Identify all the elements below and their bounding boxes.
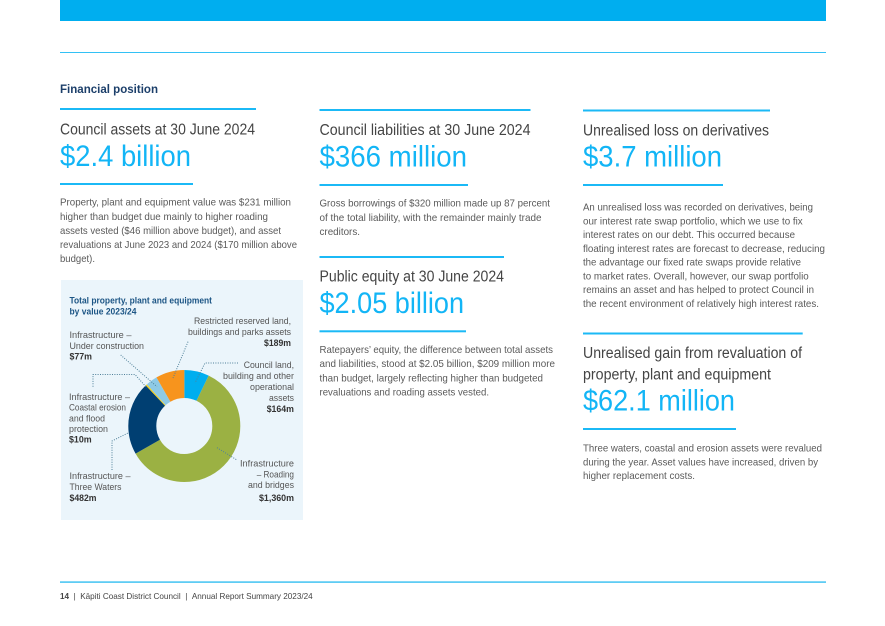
chart title: by value 2023/24 [70,306,137,316]
text block: council liabilities: of the total liability, with the remainder mainly trade [320,213,542,224]
text block: unrealised loss [583,203,825,310]
label: coastal erosion: and flood [69,413,105,423]
label: roading and bridges: and bridges [248,480,295,490]
text block: council liabilities: Gross borrowings of $320 million made up 87 percent [320,199,550,210]
section heading: Financial position [60,82,158,96]
footer rule [60,581,826,583]
label: coastal erosion: $10m [69,434,92,444]
text block: unrealised loss: the recent environment of relatively high interest rates. [583,299,819,310]
value: council liabilities: $366 million [320,140,467,174]
heading: unrealised gain [583,345,803,383]
panel: public equity [320,256,555,398]
text block: unrealised gain: during the year. Asset values have increased, driven by [583,457,819,468]
label: council land: operational [250,382,294,392]
label: coastal erosion: protection [69,424,108,434]
label: coastal erosion [69,392,130,444]
label: council land: $164m [267,404,294,414]
header rule [60,52,826,53]
panel: property, plant and equipment chart [61,280,303,520]
heading: council assets: Council assets at 30 June 2024 [60,122,255,138]
text block: public equity: Ratepayers’ equity, the difference between total assets [320,345,553,356]
panel: unrealised gain from revaluation [583,332,822,482]
panel: council assets [60,108,297,265]
label: three waters [70,471,131,503]
top banner [60,0,826,21]
label: three waters: $482m [70,493,97,503]
text block: unrealised gain: higher replacement costs. [583,471,695,482]
text block: council assets: Property, plant and equipment value was $231 million [60,198,291,209]
label: under construction: Under construction [70,341,144,351]
heading: unrealised gain: Unrealised gain from revaluation of [583,345,803,362]
text block: public equity: than budget, largely reflecting higher than budgeted [320,373,543,384]
heading: unrealised loss: Unrealised loss on derivatives [583,123,769,140]
text block: council assets: assets vested ($46 million above budget), and asset [60,226,281,237]
text block: unrealised loss: remains an asset and has helped to protect Council in [583,285,814,296]
text block: unrealised loss: An unrealised loss was recorded on derivatives, being [583,203,813,214]
value: council assets: $2.4 billion [60,140,191,173]
heading: public equity: Public equity at 30 June 2024 [320,269,504,286]
text block: council assets: higher than budget due mainly to higher roading [60,212,268,223]
text block: council liabilities [320,199,550,238]
label: coastal erosion: Infrastructure – [69,392,130,402]
footer text: 14 | Kāpiti Coast District Council | Annual Report Summary 2023/24 [60,592,313,601]
label: roading and bridges: – Roading [257,470,294,480]
donut chart [142,384,226,468]
label: roading and bridges: $1,360m [259,493,294,503]
label: council land: Council land, [244,360,294,370]
value: unrealised gain: $62.1 million [583,384,735,418]
label: three waters: Three Waters [70,482,122,492]
chart title [70,296,212,316]
text block: unrealised loss: interest rates on our debt. This occurred because [583,230,795,241]
value: unrealised loss: $3.7 million [583,140,722,174]
chart title: Total property, plant and equipment [70,296,212,306]
text block: council assets: budget). [60,254,95,265]
value: public equity: $2.05 billion [320,287,464,320]
label: council land: assets [269,393,295,403]
label: roading and bridges: Infrastructure [240,459,294,469]
label: three waters: Infrastructure – [70,471,131,481]
label: restricted reserved land: Restricted reserved land, [194,316,291,326]
text block: public equity [320,345,555,398]
text block: unrealised loss: floating interest rates are forecast to decrease, reducing [583,244,825,255]
label: council land [223,360,295,414]
text block: public equity: revaluations and roading assets vested. [320,388,489,398]
label: under construction: Infrastructure – [70,330,132,340]
panel: council liabilities [320,109,550,238]
label: restricted reserved land: buildings and parks assets [188,327,292,337]
text block: council assets: revaluations at June 2023 and 2024 ($170 million above [60,240,297,251]
label: roading and bridges [240,459,295,503]
text block: unrealised gain [583,444,822,482]
label: restricted reserved land: $189m [264,338,291,348]
text block: council liabilities: creditors. [320,227,360,238]
heading: council liabilities: Council liabilities at 30 June 2024 [320,122,531,139]
text block: unrealised loss: the advantage our fixed rate swaps provide relative [583,258,801,269]
text block: unrealised gain: Three waters, coastal and erosion assets were revalued [583,444,822,455]
text block: council assets [60,198,297,265]
label: under construction: $77m [70,352,92,362]
leader lines [93,342,238,470]
label: coastal erosion: Coastal erosion [69,403,126,413]
label: restricted reserved land [188,316,292,348]
text block: public equity: and liabilities, stood at $2.05 billion, $209 million more [320,359,555,370]
text block: unrealised loss: to market rates. Overall, however, our swap portfolio [583,271,809,282]
label: council land: building and other [223,371,294,381]
text block: unrealised loss: our interest rate swap portfolio, which we use to fix [583,216,803,227]
heading: unrealised gain: property, plant and equipment [583,366,772,383]
panel: unrealised loss on derivatives [583,110,825,310]
label: under construction [70,330,144,362]
